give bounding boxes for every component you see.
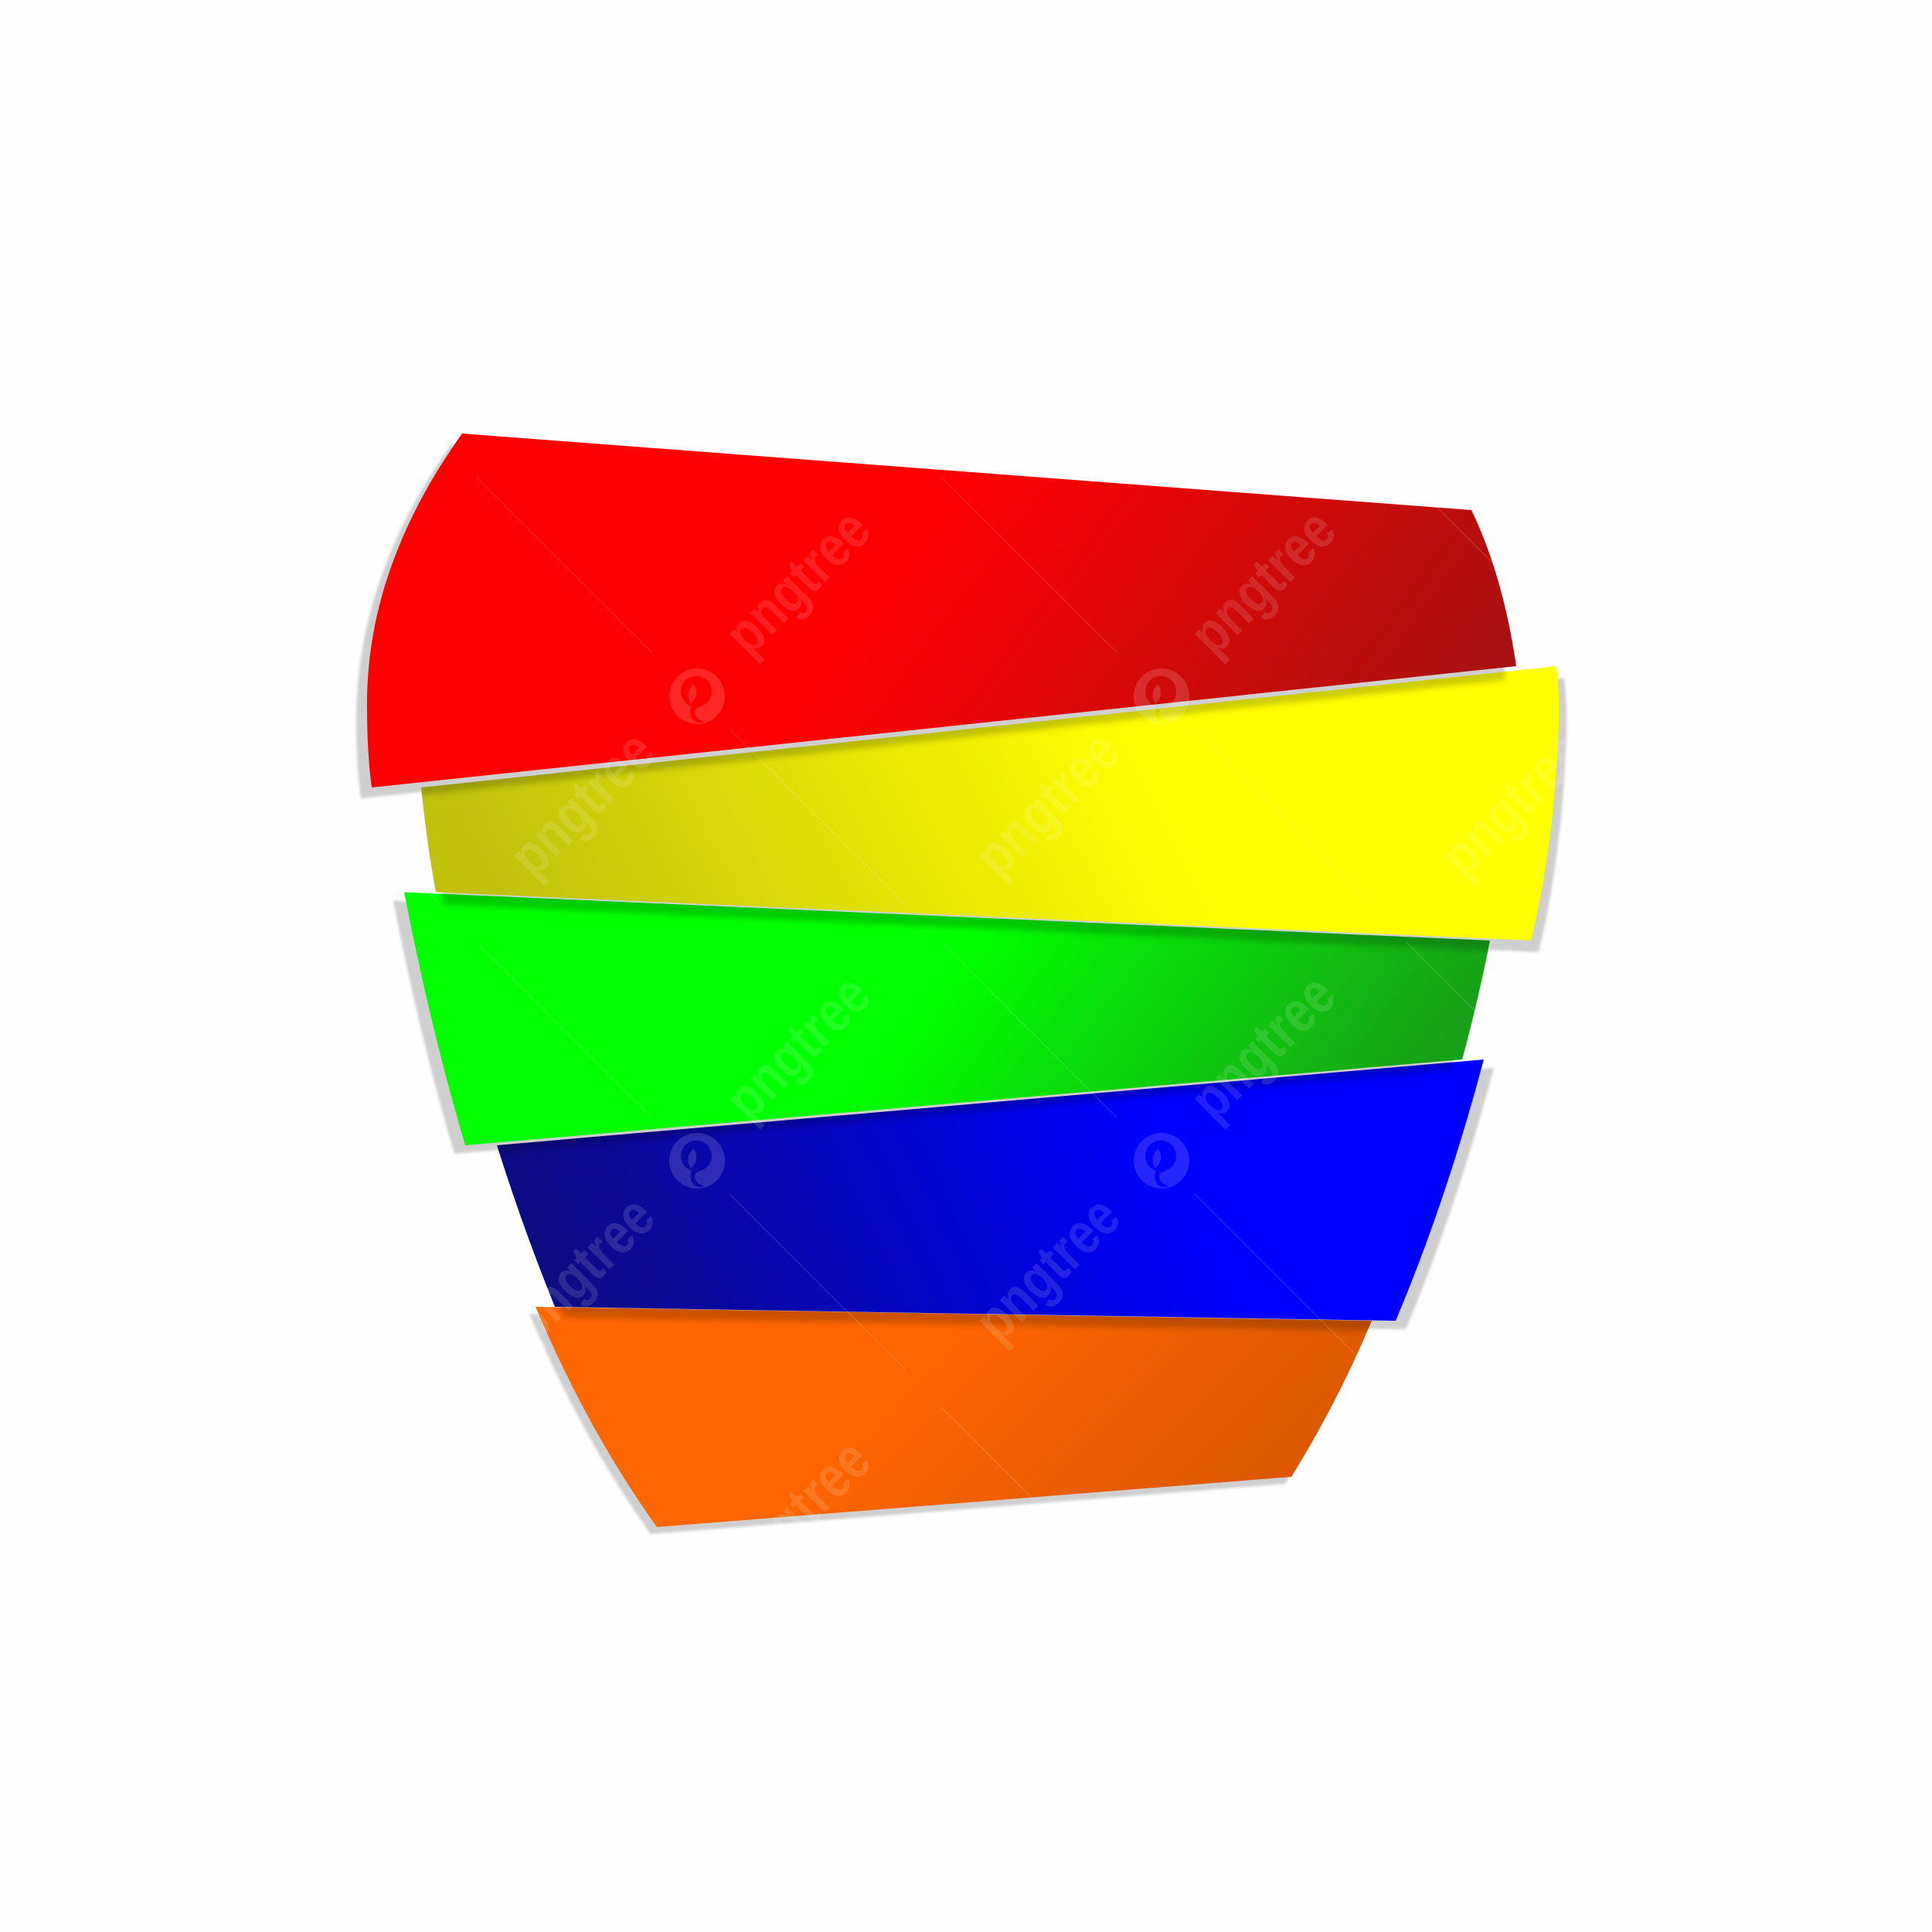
watermark: pngtree text: pngtree: [961, 718, 1133, 889]
watermark: round logos: [669, 668, 1189, 1189]
watermark: pngtree text: pngtree: [961, 1183, 1133, 1355]
band: orange: [536, 1307, 1372, 1527]
band: blue: [497, 1060, 1484, 1321]
watermark: pngtree text: pngtree: [1177, 496, 1349, 668]
watermark: pngtree text: [496, 496, 1598, 1598]
watermark: pngtree text: pngtree: [712, 1427, 883, 1598]
watermark: diagonal hairlines: [264, 477, 1582, 1583]
band: yellow: [421, 666, 1560, 940]
watermark: pngtree text: pngtree: [712, 961, 883, 1133]
drop shadows of the bands: [356, 444, 1566, 1534]
watermark: pngtree text: pngtree: [496, 718, 668, 889]
watermark: pngtree text: pngtree: [1427, 718, 1598, 889]
band: green: [404, 892, 1490, 1145]
watermark: pngtree text: pngtree: [496, 1183, 668, 1355]
watermark: pngtree text: pngtree: [1177, 961, 1349, 1133]
band: red: [367, 434, 1516, 787]
watermark: pngtree text: pngtree: [712, 496, 883, 668]
